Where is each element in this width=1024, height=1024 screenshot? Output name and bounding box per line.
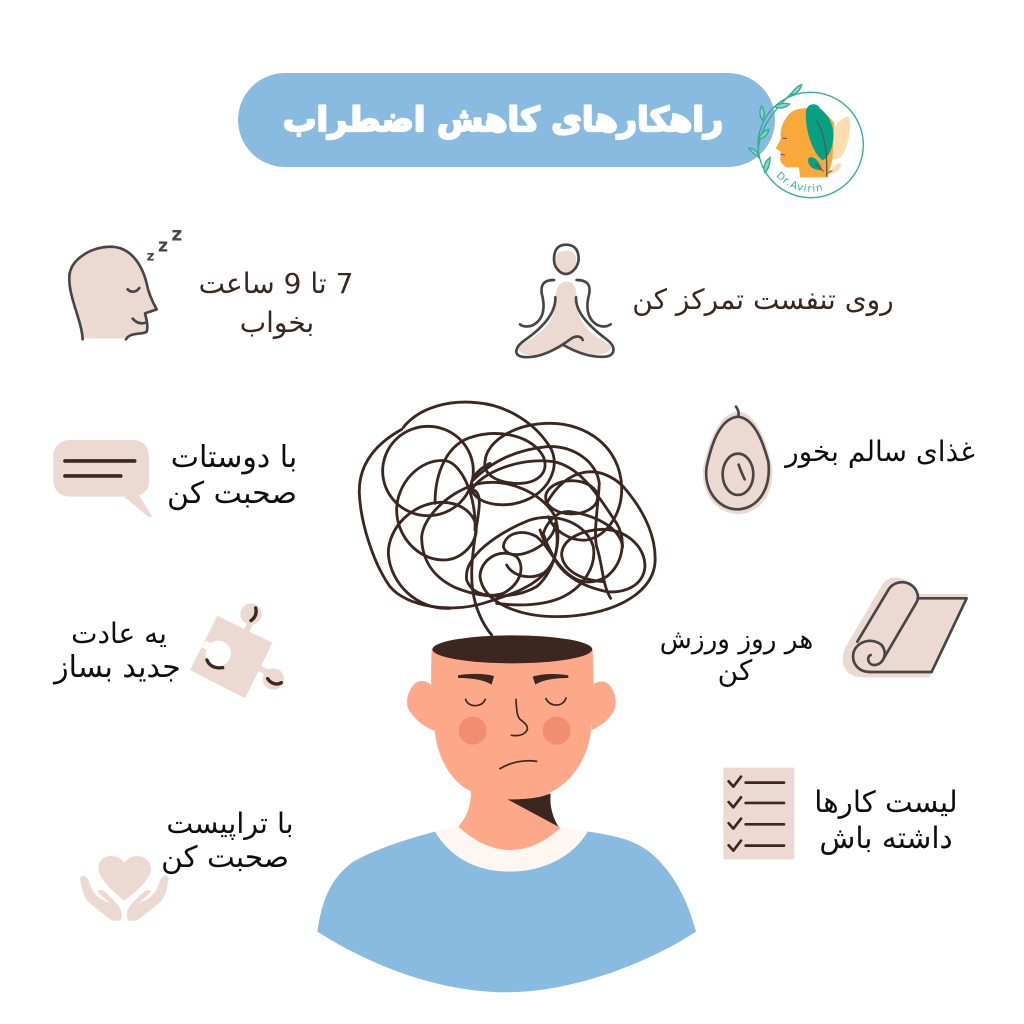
ears: [407, 681, 437, 732]
collar: [435, 827, 588, 872]
item: healthy food: [703, 407, 975, 514]
icon: meditation: [516, 245, 613, 357]
text: to-do list: [814, 785, 958, 855]
icon: avocado: [703, 407, 772, 514]
face: [431, 649, 594, 799]
icon: checklist: [723, 768, 794, 859]
text: therapist: با تراپیست: [166, 807, 294, 840]
brows: [458, 674, 568, 685]
text: new habit: [52, 617, 181, 685]
item: to-do list: [723, 768, 958, 859]
text: friends: صحبت کن: [167, 476, 297, 511]
logo: Dr Avirin: Dr.Avirin: [776, 172, 822, 192]
eyes, nose, mouth: [466, 698, 566, 769]
text: friends: با دوستات: [171, 440, 297, 475]
item: new habit: [52, 603, 284, 698]
text: exercise: کن: [718, 654, 753, 687]
text: new habit: جدید بساز: [52, 650, 181, 685]
icon: sleeping head: z: [171, 225, 182, 246]
icon: sleeping head: z: [158, 237, 168, 257]
text: therapist: [161, 807, 294, 874]
cheeks: [459, 717, 487, 745]
item: exercise: [660, 577, 968, 687]
figure: man with open head: [317, 635, 696, 992]
text: sleep: بخواب: [240, 306, 314, 339]
icon: sleeping head: [69, 225, 182, 339]
neck: [458, 787, 560, 850]
text: to-do list: لیست کارها: [814, 785, 958, 819]
neck shadow: [507, 793, 558, 827]
title banner: [238, 73, 775, 167]
text: therapist: صحبت کن: [161, 840, 289, 874]
title banner: راهکارهای کاهش اضطراب: [283, 100, 723, 140]
tangled thoughts scribble: [359, 402, 655, 635]
text: to-do list: داشته باش: [819, 821, 953, 855]
shirt: [317, 832, 696, 992]
head opening: [432, 635, 592, 663]
item: breathing: [516, 245, 894, 357]
item: therapist: [80, 807, 294, 921]
item: friends: [53, 440, 297, 518]
icon: sleeping head: z: [147, 250, 155, 265]
text: sleep: 7 تا 9 ساعت: [199, 267, 353, 300]
text: healthy food: غذای سالم بخور: [783, 435, 975, 468]
text: friends: [167, 440, 297, 511]
text: exercise: [660, 625, 813, 687]
icon: yoga mat: [843, 577, 968, 677]
item: sleep: [69, 225, 353, 339]
icon: puzzle piece: [190, 603, 284, 698]
icon: hands holding heart: [80, 856, 169, 921]
text: breathing: روی تنفست تمرکز کن: [632, 283, 894, 316]
text: new habit: یه عادت: [71, 617, 167, 650]
text: exercise: هر روز ورزش: [660, 625, 813, 655]
icon: speech bubble: [53, 440, 152, 518]
text: sleep: [199, 267, 353, 339]
logo: Dr Avirin: [748, 84, 864, 198]
